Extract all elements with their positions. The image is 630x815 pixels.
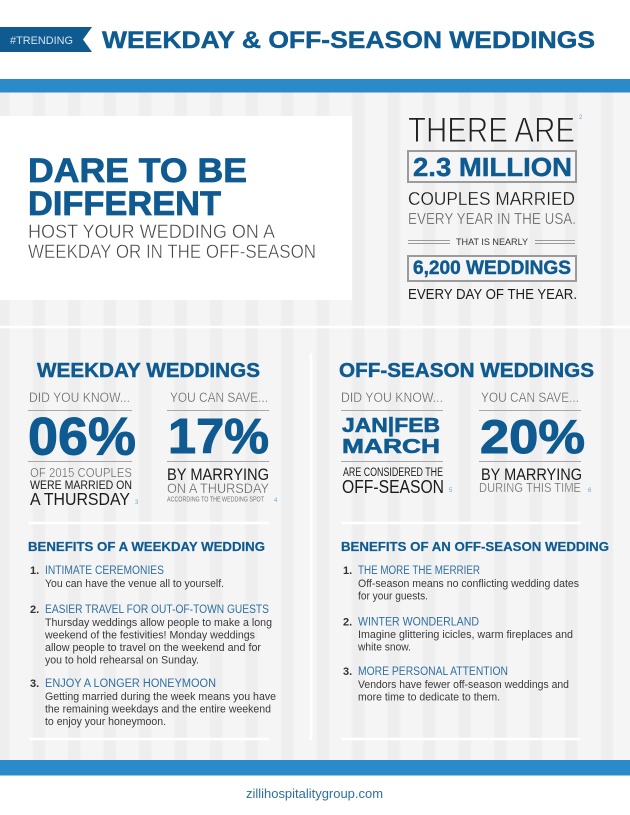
stat: jan feb march: JAN|FEB [342,415,440,437]
stat: 06 percent: DID YOU KNOW... [29,390,130,405]
stat: 17 percent: BY MARRYING [167,466,269,484]
couples married: COUPLES MARRIED [408,188,575,209]
benefit 3 [30,678,276,728]
stat: jan feb march: MARCH [342,435,440,458]
stat: 20 percent: 6 [588,488,592,494]
subheading: HOST YOUR WEDDING ON A [28,222,275,243]
heading: benefits of an off-season wedding: BENEFITS OF AN OFF-SEASON WEDDING [341,540,609,554]
benefit 2: EASIER TRAVEL FOR OUT-OF-TOWN GUESTS [45,604,269,616]
benefit 3: Vendors have fewer off-season weddings and [358,679,569,691]
benefit 1: 1. [30,565,39,577]
panel: national statistics [408,111,583,303]
benefit 3 [343,666,569,704]
footer url: zillihospitalitygroup.com [246,786,383,801]
benefit 3: MORE PERSONAL ATTENTION [358,666,508,678]
benefit 2: allow people to travel on the weekend and for [45,642,261,654]
stat box: 6,200 weddings: 6,200 WEDDINGS [413,258,571,279]
benefit 3: Getting married during the week means you have [45,691,276,703]
stat box: 2.3 million: 2.3 MILLION [413,152,572,182]
subheading [28,222,316,263]
heading: dare to be different: DIFFERENT [28,185,221,223]
stat: jan feb march: DID YOU KNOW... [341,390,443,405]
bottom blue bar [0,760,630,776]
benefit 2: WINTER WONDERLAND [358,616,479,628]
heading: benefits of a weekday wedding: BENEFITS OF A WEEKDAY WEDDING [28,540,265,554]
benefit 3: more time to dedicate to them. [358,692,500,704]
benefit 1: 1. [343,565,352,577]
every day: EVERY DAY OF THE YEAR. [408,286,577,303]
that is nearly [408,237,575,248]
benefit 3: to enjoy your honeymoon. [45,716,166,728]
subheading: WEEKDAY OR IN THE OFF-SEASON [28,242,316,263]
benefit 2: you to hold rehearsal on Sunday. [45,654,199,666]
benefit 3: 3. [343,666,352,678]
benefit 1: Off-season means no conflicting wedding dates [358,578,580,590]
stat: 06 percent: WERE MARRIED ON [30,480,132,492]
stat: 17 percent: 17% [168,410,269,464]
trending ribbon: #TRENDING [10,35,73,47]
panel: weekday weddings [28,360,278,739]
stat: 20 percent [479,390,592,495]
stat: jan feb march: 5 [449,488,453,494]
title: WEEKDAY & OFF-SEASON WEDDINGS [102,27,595,54]
stat: 06 percent: 3 [135,500,139,506]
top blue bar [0,79,630,92]
benefit 2: Thursday weddings allow people to make a long [45,617,272,629]
benefit 1 [30,565,224,590]
benefit 3: the remaining weekdays and the entire weekend [45,704,271,716]
benefit 2: weekend of the festivities! Monday weddings [44,630,256,642]
stat: 06 percent: A THURSDAY [30,489,130,509]
panel: dare to be different [0,116,352,300]
benefit 2: 2. [343,616,352,628]
stat: 17 percent: 4 [274,498,278,504]
stat: 20 percent: YOU CAN SAVE... [481,390,579,405]
heading: dare to be different: DARE TO BE [28,152,247,190]
panel: off-season weddings [339,360,609,739]
benefit 2: white snow. [357,642,411,654]
stat: 06 percent: OF 2015 COUPLES [30,466,132,480]
stat: jan feb march: ARE CONSIDERED THE [343,467,443,479]
benefit 2 [30,604,272,666]
that is nearly: THAT IS NEARLY [456,237,529,248]
there are: THERE ARE [408,111,575,150]
stat: 06 percent: 06% [28,408,136,466]
heading: weekday weddings: WEEKDAY WEDDINGS [37,360,260,382]
stat: 20 percent: 20% [480,410,585,463]
stat: 17 percent: ON A THURSDAY [167,480,270,496]
benefit 2: Imagine glittering icicles, warm fireplaces and [358,629,573,641]
benefit 3: ENJOY A LONGER HONEYMOON [45,678,216,690]
every year: EVERY YEAR IN THE USA. [408,211,576,228]
stat: 20 percent: DURING THIS TIME [479,481,581,495]
benefit 1: for your guests. [358,590,428,602]
heading: off-season weddings: OFF-SEASON WEDDINGS [339,360,594,382]
header [0,27,595,54]
trending ribbon [0,27,92,52]
benefit 1: INTIMATE CEREMONIES [45,565,164,577]
benefit 1 [343,565,580,602]
stat: 17 percent: YOU CAN SAVE... [170,390,268,405]
stat: jan feb march: OFF-SEASON [342,477,444,497]
stat: 17 percent [167,390,278,504]
benefit 2 [343,616,573,654]
footnote 2: 2 [579,115,583,121]
heading: dare to be different [28,152,247,223]
benefit 1: You can have the venue all to yourself. [45,578,224,590]
benefit 2: 2. [30,604,39,616]
benefit 1: THE MORE THE MERRIER [358,565,480,577]
stat: jan feb march [341,390,453,497]
stat: 06 percent [28,390,139,509]
benefit 3: 3. [30,678,39,690]
stat: 20 percent: BY MARRYING [481,466,582,484]
stat: 17 percent: ACCORDING TO THE WEDDING SPOT [167,496,265,504]
